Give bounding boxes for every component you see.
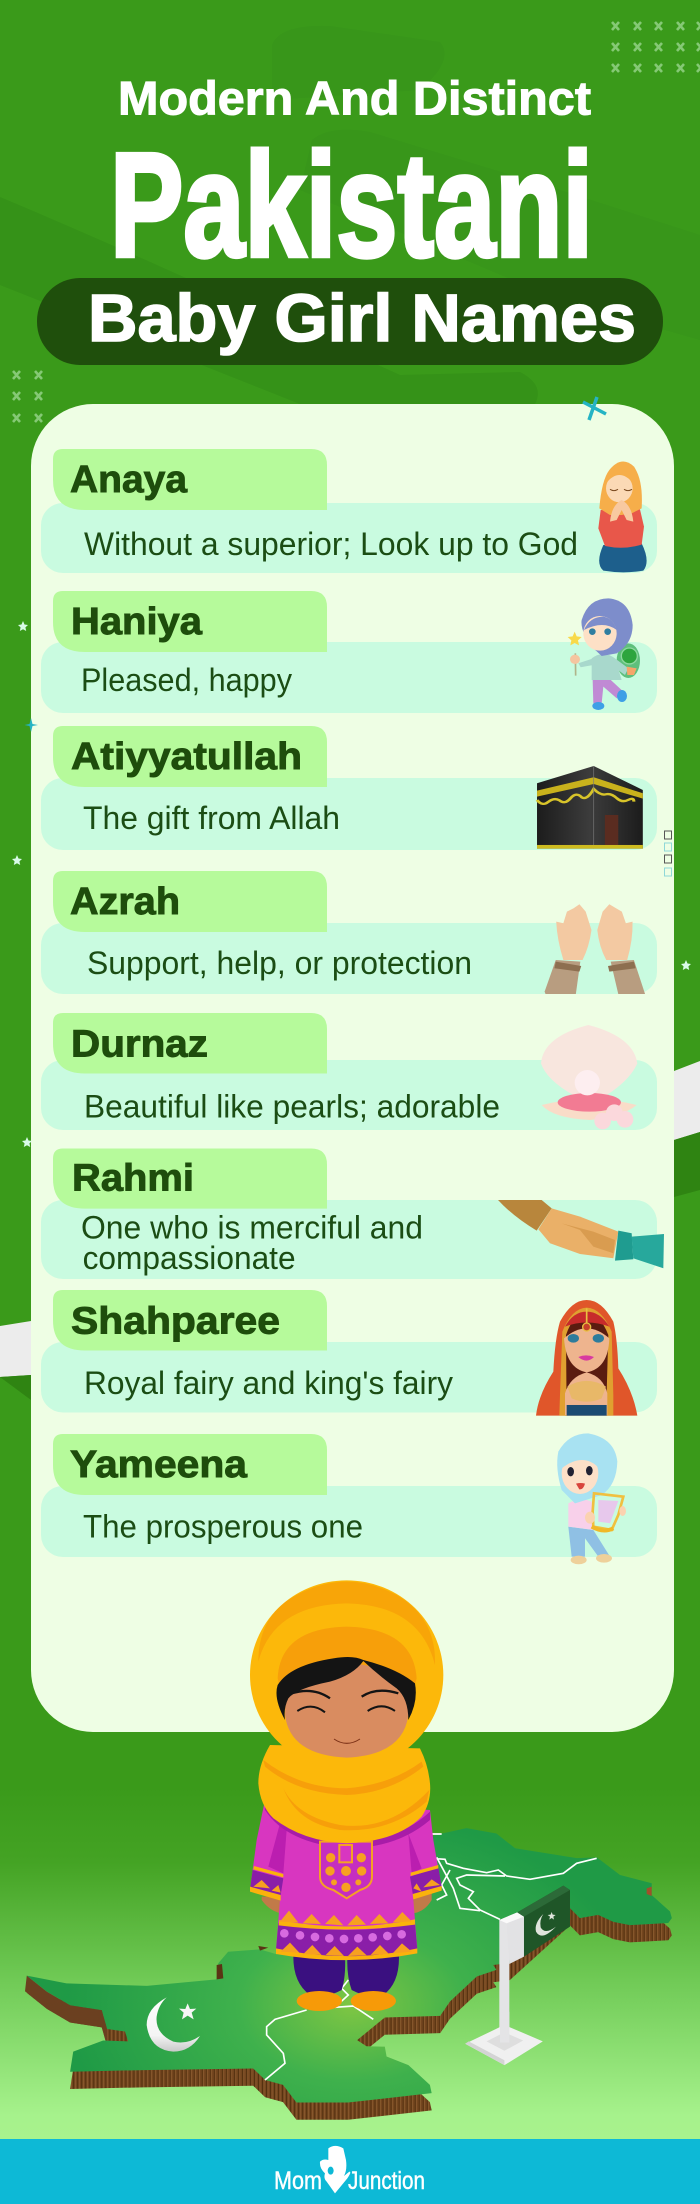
meaning text: The prosperous one: [83, 1508, 363, 1544]
map details west: [147, 1946, 373, 2080]
name label: [53, 1148, 327, 1209]
icon: girl with harp: [557, 1433, 626, 1564]
name label: Rahmi: [72, 1158, 194, 1200]
title: Modern And Distinct: Modern And Distinct: [118, 72, 591, 126]
name label: [53, 871, 327, 932]
footer band: [0, 2139, 700, 2204]
icon: star cluster: [12, 621, 691, 1147]
meaning bar: [41, 778, 657, 850]
map of Pakistan: [25, 1828, 672, 2120]
row: Azrah: [41, 871, 657, 994]
row: Anaya: [41, 449, 657, 573]
row: Durnaz: [41, 1013, 657, 1130]
white strip left: [0, 1321, 31, 1377]
trousers: [293, 1957, 345, 1996]
meaning text: [81, 1209, 423, 1276]
shoes: [297, 1991, 342, 2011]
meaning text: One who is merciful and: [81, 1209, 423, 1245]
decorative cross pattern left: [13, 371, 42, 422]
name label: Yameena: [70, 1444, 248, 1486]
hem: [276, 1923, 417, 1958]
name label: [53, 1013, 327, 1074]
name label: Anaya: [70, 459, 188, 501]
girl body: [250, 1800, 442, 2011]
meaning bar: [41, 503, 657, 573]
map west edge side: [25, 1976, 107, 2046]
map side: [27, 1845, 672, 2120]
name label: [53, 449, 327, 510]
white strip right: [674, 1061, 700, 1140]
kurta: [250, 1800, 442, 1958]
hair: [276, 1657, 416, 1720]
meaning bar: [41, 1486, 657, 1557]
decorative cross pattern top right: [612, 22, 700, 72]
meaning text: Royal fairy and king's fairy: [84, 1365, 453, 1401]
meaning bar: [41, 642, 657, 713]
flag: [517, 1886, 570, 1957]
icon: Kaaba: [537, 766, 643, 849]
flag stand base: [465, 2012, 543, 2065]
row: Rahmi: [41, 1148, 664, 1279]
name label: [53, 1434, 327, 1495]
panel: names card: [31, 404, 674, 1732]
crescent and star: [147, 1997, 200, 2052]
eyes and smile: [292, 1691, 398, 1698]
logo text: Junction: Junction: [348, 2167, 425, 2195]
name label: Haniya: [71, 601, 203, 643]
icon: girl with wand and backpack: [568, 598, 640, 710]
logo icon: [320, 2146, 350, 2193]
name label: Shahparee: [71, 1300, 280, 1342]
name label: Azrah: [70, 881, 180, 923]
name label: Durnaz: [71, 1024, 208, 1066]
meaning bar: [41, 1342, 657, 1412]
row: Atiyyatullah: [41, 726, 657, 850]
meaning text: Support, help, or protection: [87, 945, 472, 981]
row: Haniya: [41, 591, 657, 713]
name label: [53, 591, 327, 652]
meaning bar: [41, 1060, 657, 1130]
name label: [53, 1290, 327, 1350]
meaning text: Without a superior; Look up to God: [84, 526, 578, 562]
icon: handshake: [498, 1200, 664, 1268]
decorative small squares: [664, 831, 672, 876]
map details north and flag: [430, 1834, 652, 2043]
flag pole: [499, 1920, 509, 2043]
lower drape: [258, 1745, 430, 1843]
name label: Atiyyatullah: [71, 736, 302, 778]
icon: praying girl: [598, 462, 647, 572]
hood: [250, 1580, 443, 1770]
title pill: Baby Girl Names: Baby Girl Names: [88, 281, 636, 356]
name label: [53, 726, 327, 787]
meaning text: Pleased, happy: [81, 662, 292, 698]
icon: pearl in shell: [541, 1025, 637, 1129]
meaning text: compassionate: [83, 1240, 296, 1276]
icon: teal cross: [583, 397, 606, 420]
meaning bar: [41, 1200, 657, 1279]
meaning bar: [41, 923, 657, 994]
map top: [27, 1828, 672, 2103]
girl head and scarf: [250, 1580, 443, 1843]
icon: bride in red scarf: [536, 1300, 637, 1416]
sleeve bands: [250, 1870, 283, 1899]
meaning text: Beautiful like pearls; adorable: [84, 1088, 500, 1124]
meaning text: The gift from Allah: [83, 800, 340, 836]
logo text: Mom: Mom: [274, 2167, 322, 2195]
icon: praying hands: [545, 904, 645, 994]
row: Shahparee: [41, 1290, 657, 1416]
row: Yameena: [41, 1433, 657, 1564]
girl in yellow scarf and pink kurta: [250, 1580, 443, 2011]
hands: [262, 1890, 432, 1913]
neck panel: [320, 1842, 372, 1898]
face: [285, 1663, 408, 1758]
